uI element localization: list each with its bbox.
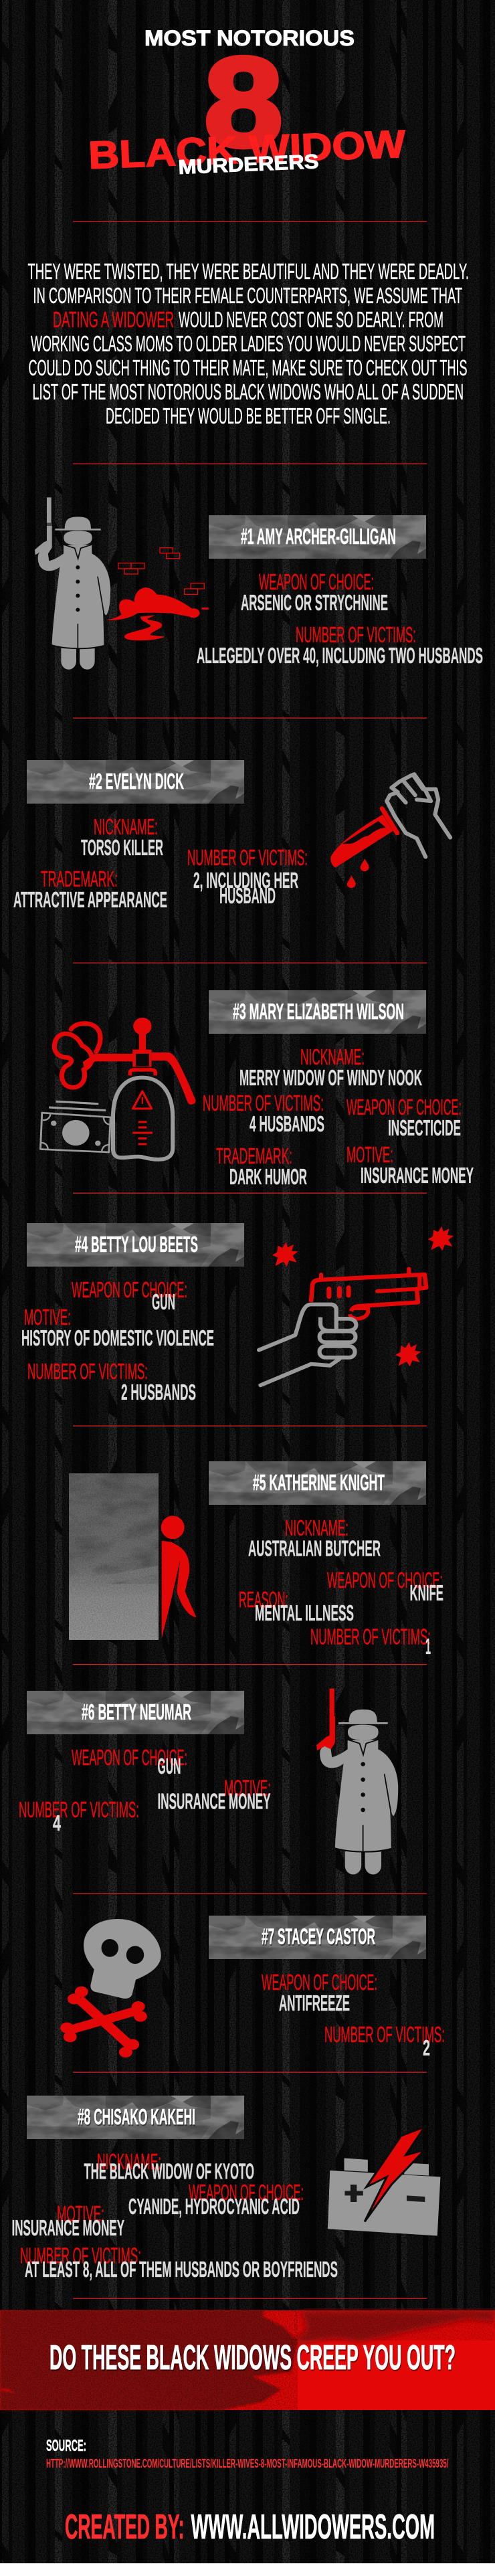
fact: reason: REASON: [239, 1587, 288, 1612]
panel: #3 Mary Elizabeth Wilson [40, 990, 474, 1189]
panel: #6 Betty Neumar: WEAPON OF CHOICE: [72, 1745, 187, 1770]
fact: trademark [13, 866, 167, 912]
icon: man with gun and body [35, 497, 209, 670]
panel: #2 Evelyn Dick [13, 760, 450, 912]
fact: nickname: NICKNAME: [94, 814, 158, 839]
name plate: #8 CHISAKO KAKEHI [78, 2104, 195, 2129]
icon: hand with bloody knife [330, 774, 450, 888]
fact: motive [12, 2201, 124, 2240]
fact: weapon of choice: GUN [152, 1289, 175, 1314]
fact: nickname: THE BLACK WIDOW OF KYOTO [84, 2158, 254, 2184]
panel: #5 Katherine Knight [69, 1461, 443, 1659]
icon: door with red figure [69, 1473, 197, 1640]
name plate: #2 EVELYN DICK [89, 769, 184, 794]
panel: #4 Betty Lou Beets: WEAPON OF CHOICE: [72, 1277, 187, 1302]
name plate [27, 2096, 244, 2139]
fact: number of victims: 2, INCLUDING HER [193, 868, 298, 893]
source block [46, 2437, 448, 2470]
panel: #4 Betty Lou Beets [21, 1223, 454, 1404]
fact: weapon of choice [72, 1745, 187, 1778]
fact: number of victims [197, 622, 483, 668]
panel: #1 Amy Archer-Gilligan [35, 497, 483, 670]
name plate [27, 760, 244, 804]
fact: motive: INSURANCE MONEY [158, 1789, 270, 1813]
fact: weapon of choice: ANTIFREEZE [279, 1991, 350, 2015]
credit line: CREATED BY: [65, 2508, 185, 2547]
icon: car battery with lightning bolt [328, 2127, 440, 2236]
fact: number of victims: NUMBER OF VICTIMS: [27, 1359, 148, 1384]
name plate [27, 1223, 244, 1267]
fact: weapon of choice [72, 1277, 187, 1314]
fact: trademark: TRADEMARK: [41, 866, 118, 891]
fact: reason [239, 1587, 354, 1625]
fact: nickname [248, 1515, 381, 1560]
number eight: 8 [204, 31, 283, 173]
fact: nickname [84, 2149, 254, 2184]
fact: weapon of choice: GUN [158, 1754, 181, 1778]
title [88, 26, 406, 179]
fact: number of victims: 2 HUSBANDS [121, 1380, 196, 1404]
fact: weapon of choice: KNIFE [409, 1580, 443, 1605]
name plate: #6 BETTY NEUMAR [82, 1699, 191, 1724]
fact: trademark: ATTRACTIVE APPEARANCE [13, 887, 167, 912]
intro text block: DATING A WIDOWER [53, 307, 174, 332]
fact: motive: INSURANCE MONEY [12, 2215, 124, 2240]
name plate: #4 BETTY LOU BEETS [75, 1232, 198, 1257]
fact: weapon of choice [262, 1970, 377, 2015]
fact: number of victims [19, 1797, 139, 1835]
fact: motive: MOTIVE: [346, 1142, 393, 1167]
name plate: #7 STACEY CASTOR [262, 1924, 375, 1948]
fact: nickname: NICKNAME: [97, 2149, 161, 2174]
fact: motive: MOTIVE: [24, 1305, 71, 1329]
panel: #5 Katherine Knight: 1 [425, 1634, 431, 1659]
fact: weapon of choice [327, 1568, 443, 1605]
credit line [65, 2508, 435, 2547]
title line: black widow: BLACK WIDOW [88, 122, 406, 177]
fact: number of victims: 4 [53, 1811, 61, 1835]
panel: #8 Chisako Kakehi: WEAPON OF CHOICE: [189, 2180, 304, 2205]
fact: reason: MENTAL ILLNESS [255, 1600, 354, 1625]
panel: #7 Stacey Castor: WEAPON OF CHOICE: [262, 1970, 377, 1995]
name plate [209, 1916, 426, 1959]
banner background: blood splash [0, 2310, 495, 2410]
source label: SOURCE: [46, 2437, 86, 2455]
fact: weapon of choice [128, 2180, 304, 2219]
fact: number of victims [203, 1091, 324, 1136]
fact: trademark: TRADEMARK: [216, 1143, 292, 1168]
fact: number of victims [20, 2243, 338, 2282]
name plate: #5 KATHERINE KNIGHT [253, 1470, 385, 1495]
fact: number of victims: HUSBAND [219, 883, 276, 908]
icon: man with red gun [316, 1689, 398, 1875]
name plate [209, 990, 426, 1034]
fact: number of victims [324, 2022, 445, 2060]
icon: hand with pistol and bullet holes [259, 1226, 454, 1385]
fact: nickname: NICKNAME: [285, 1515, 349, 1540]
fact: motive: MOTIVE: [57, 2201, 104, 2226]
fact: nickname [239, 1044, 422, 1090]
fact: number of victims: NUMBER OF VICTIMS: [19, 1797, 139, 1822]
fact: number of victims [27, 1359, 196, 1404]
icon: poison sprayer and money [40, 1018, 196, 1160]
fact: number of victims [187, 845, 308, 908]
name plate [209, 1461, 426, 1505]
fact: weapon of choice: CYANIDE, HYDROCYANIC ACID [128, 2194, 300, 2219]
fact: trademark [216, 1143, 307, 1189]
panel: #7 Stacey Castor [60, 1916, 445, 2060]
title line: murderers: MURDERERS [178, 151, 319, 179]
fact: number of victims: NUMBER OF VICTIMS: [20, 2243, 141, 2268]
fact: motive [346, 1142, 474, 1188]
fact: number of victims: NUMBER OF VICTIMS: [203, 1091, 324, 1115]
fact: motive: MOTIVE: [224, 1776, 271, 1800]
fact: number of victims: 2 [423, 2035, 430, 2060]
fact: weapon of choice [346, 1095, 462, 1140]
fact: number of victims: NUMBER OF VICTIMS: [187, 845, 308, 870]
panel: #6 Betty Neumar [19, 1689, 398, 1875]
name plate [209, 515, 426, 559]
fact: nickname [81, 814, 163, 860]
icon: skull and crossbones [60, 1919, 161, 2057]
fact: motive: HISTORY OF DOMESTIC VIOLENCE [21, 1325, 214, 1350]
fact: number of victims [310, 1625, 431, 1659]
name plate [27, 1691, 244, 1734]
fact: nickname: NICKNAME: [300, 1044, 365, 1069]
fact: motive [158, 1776, 271, 1813]
title line: most notorious: MOST NOTORIOUS [144, 26, 355, 50]
panel: #8 Chisako Kakehi [12, 2096, 440, 2282]
fact: number of victims: 4 HUSBANDS [250, 1111, 324, 1136]
fact: trademark: DARK HUMOR [229, 1164, 307, 1189]
fact: weapon of choice: WEAPON OF CHOICE: [259, 569, 374, 594]
fact: nickname: TORSO KILLER [81, 835, 163, 860]
panel: closing banner [0, 2310, 495, 2410]
intro text block [28, 259, 469, 428]
fact: weapon of choice [241, 569, 388, 615]
fact: motive [21, 1305, 214, 1350]
